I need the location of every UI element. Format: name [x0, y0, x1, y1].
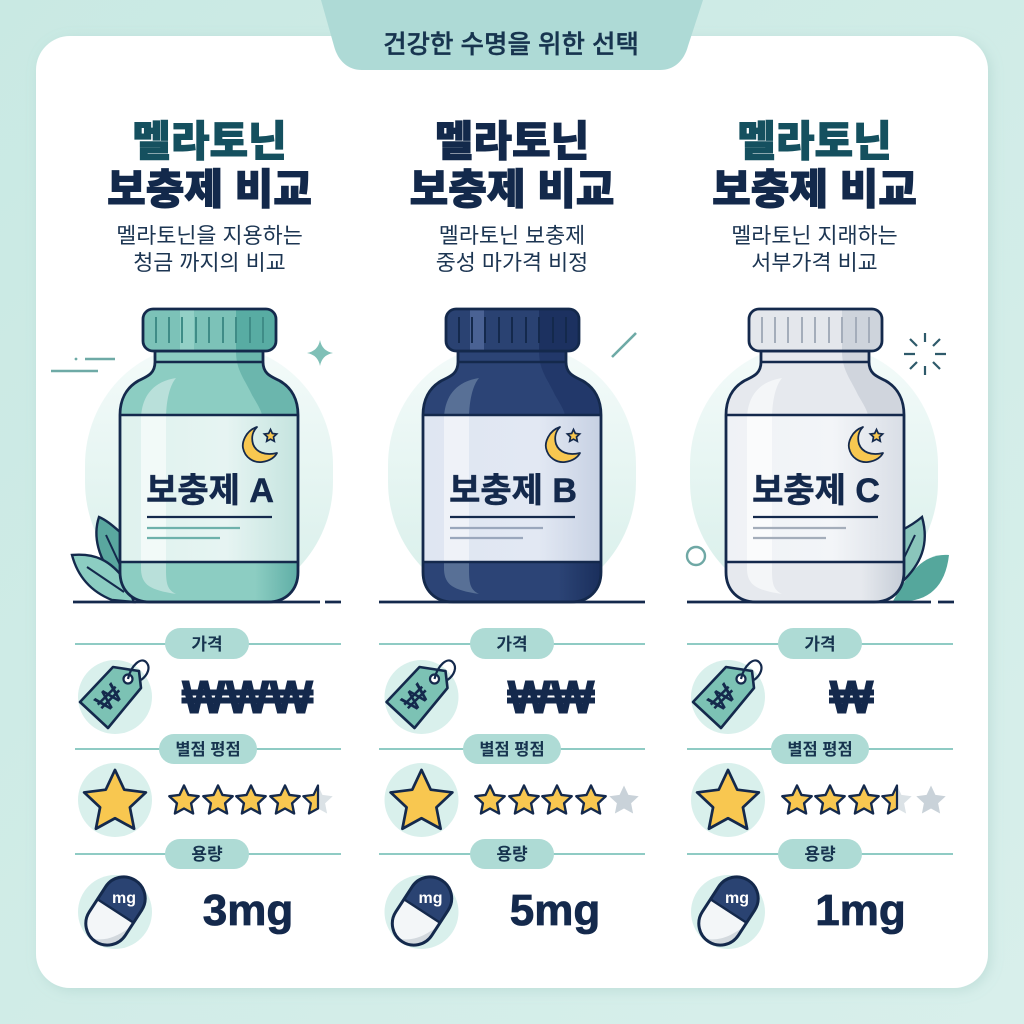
heading A: 보충제 비교	[107, 166, 312, 213]
bottle illustration A	[51, 309, 341, 602]
bottle illustration C: 보충제 C	[752, 472, 880, 510]
rating row C: 별점 평점	[787, 740, 853, 759]
rating row B	[379, 734, 645, 837]
price row A: 가격	[191, 635, 223, 654]
panel: supplement A	[51, 118, 341, 953]
bottle illustration C	[687, 309, 954, 602]
price row C: ₩	[830, 671, 874, 723]
panel: supplement C	[687, 118, 954, 953]
dose row C	[687, 839, 953, 953]
price row C	[687, 628, 953, 734]
dose row B: 5mg	[510, 886, 600, 935]
description C: 서부가격 비교	[751, 250, 878, 275]
rating row A: 별점 평점	[175, 740, 241, 759]
description A: 청금 까지의 비교	[133, 250, 286, 275]
header tab	[321, 0, 703, 70]
heading C: 멜라토닌	[737, 118, 892, 165]
panel: supplement B	[379, 118, 645, 953]
description A: 멜라토닌을 지용하는	[116, 223, 303, 248]
rating row C	[687, 734, 953, 837]
dose row A: 용량	[191, 845, 223, 864]
heading C	[712, 118, 917, 213]
price row A: ₩	[89, 678, 129, 718]
price row A	[75, 628, 341, 734]
price row C: ₩	[702, 678, 742, 718]
price row A: ₩₩₩	[182, 671, 314, 723]
dose row A	[75, 839, 341, 953]
description C	[731, 223, 898, 275]
heading B	[410, 118, 614, 213]
dose row B: mg	[418, 890, 442, 907]
description B	[436, 223, 588, 275]
dose row A: mg	[112, 890, 136, 907]
dose row B	[379, 839, 645, 953]
heading B: 보충제 비교	[410, 166, 614, 213]
description B: 중성 마가격 비정	[436, 250, 588, 275]
bottle illustration A: 보충제 A	[146, 472, 274, 510]
dose row C: 1mg	[815, 886, 906, 935]
heading A: 멜라토닌	[132, 118, 287, 165]
price row B	[379, 628, 645, 734]
dose row B: 용량	[496, 845, 528, 864]
description A	[116, 223, 303, 275]
price row B: ₩₩	[508, 671, 595, 723]
bottle illustration B: 보충제 B	[449, 472, 577, 510]
price row C: 가격	[804, 635, 836, 654]
bottle illustration B	[379, 309, 645, 602]
description B: 멜라토닌 보충제	[439, 223, 585, 248]
dose row C: mg	[725, 890, 749, 907]
dose row C: 용량	[804, 845, 836, 864]
heading B: 멜라토닌	[435, 118, 589, 165]
rating row B: 별점 평점	[479, 740, 545, 759]
description C: 멜라토닌 지래하는	[731, 223, 898, 248]
header tab: 건강한 수명을 위한 선택	[383, 31, 639, 59]
rating row A	[75, 734, 341, 837]
price row B: 가격	[496, 635, 528, 654]
dose row A: 3mg	[203, 886, 293, 935]
heading C: 보충제 비교	[712, 166, 917, 213]
price row B: ₩	[396, 678, 435, 718]
heading A	[107, 118, 312, 213]
